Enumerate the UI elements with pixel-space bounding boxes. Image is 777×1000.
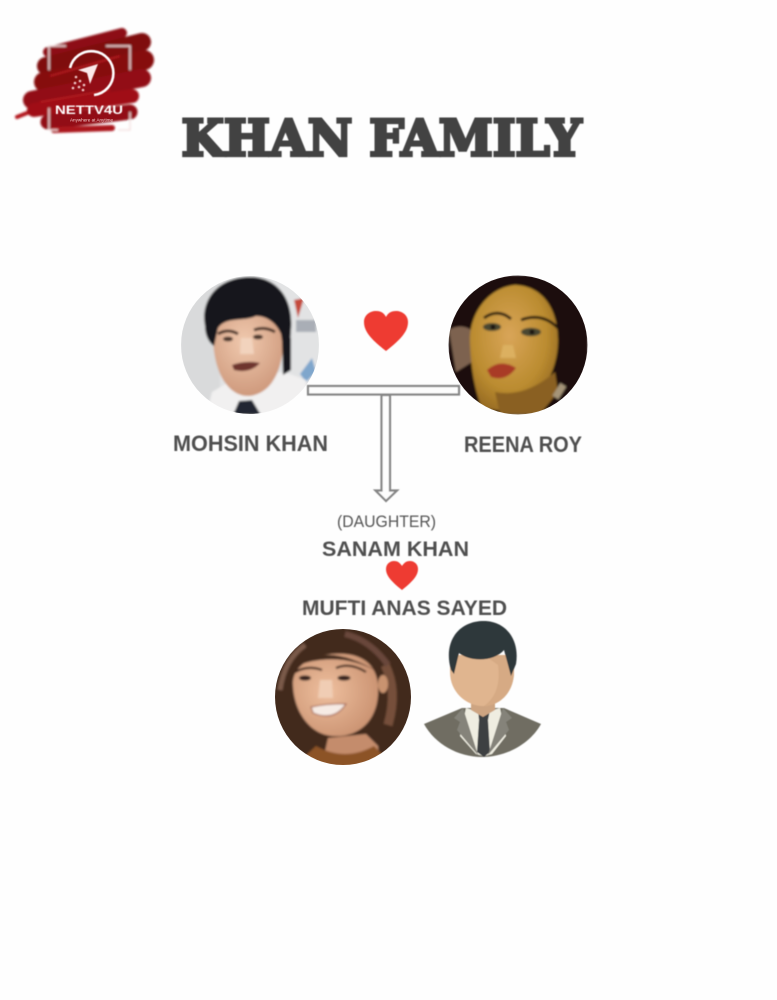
heart: couple — [386, 561, 418, 590]
portrait: Reena Roy — [448, 275, 590, 416]
logo tagline: Anywhere at Anytime — [70, 118, 113, 122]
label: Mohsin Khan: MOHSIN KHAN — [173, 431, 328, 456]
logo: NETTV4U — [17, 33, 144, 130]
avatar: Mufti Anas Sayed — [424, 621, 541, 757]
label: Mufti Anas Sayed: MUFTI ANAS SAYED — [302, 597, 507, 620]
logo mark — [70, 51, 113, 95]
portrait: Sanam Khan — [275, 629, 411, 765]
label: daughter: (DAUGHTER) — [337, 512, 436, 531]
label: Reena Roy: REENA ROY — [464, 432, 582, 457]
logo wordmark: NETTV4U — [55, 105, 123, 117]
connector arrow — [308, 386, 459, 501]
label: Sanam Khan: SANAM KHAN — [322, 538, 469, 561]
heart: parents — [364, 311, 408, 351]
title: KHAN FAMILY — [182, 108, 583, 168]
portrait: Mohsin Khan — [180, 275, 320, 420]
